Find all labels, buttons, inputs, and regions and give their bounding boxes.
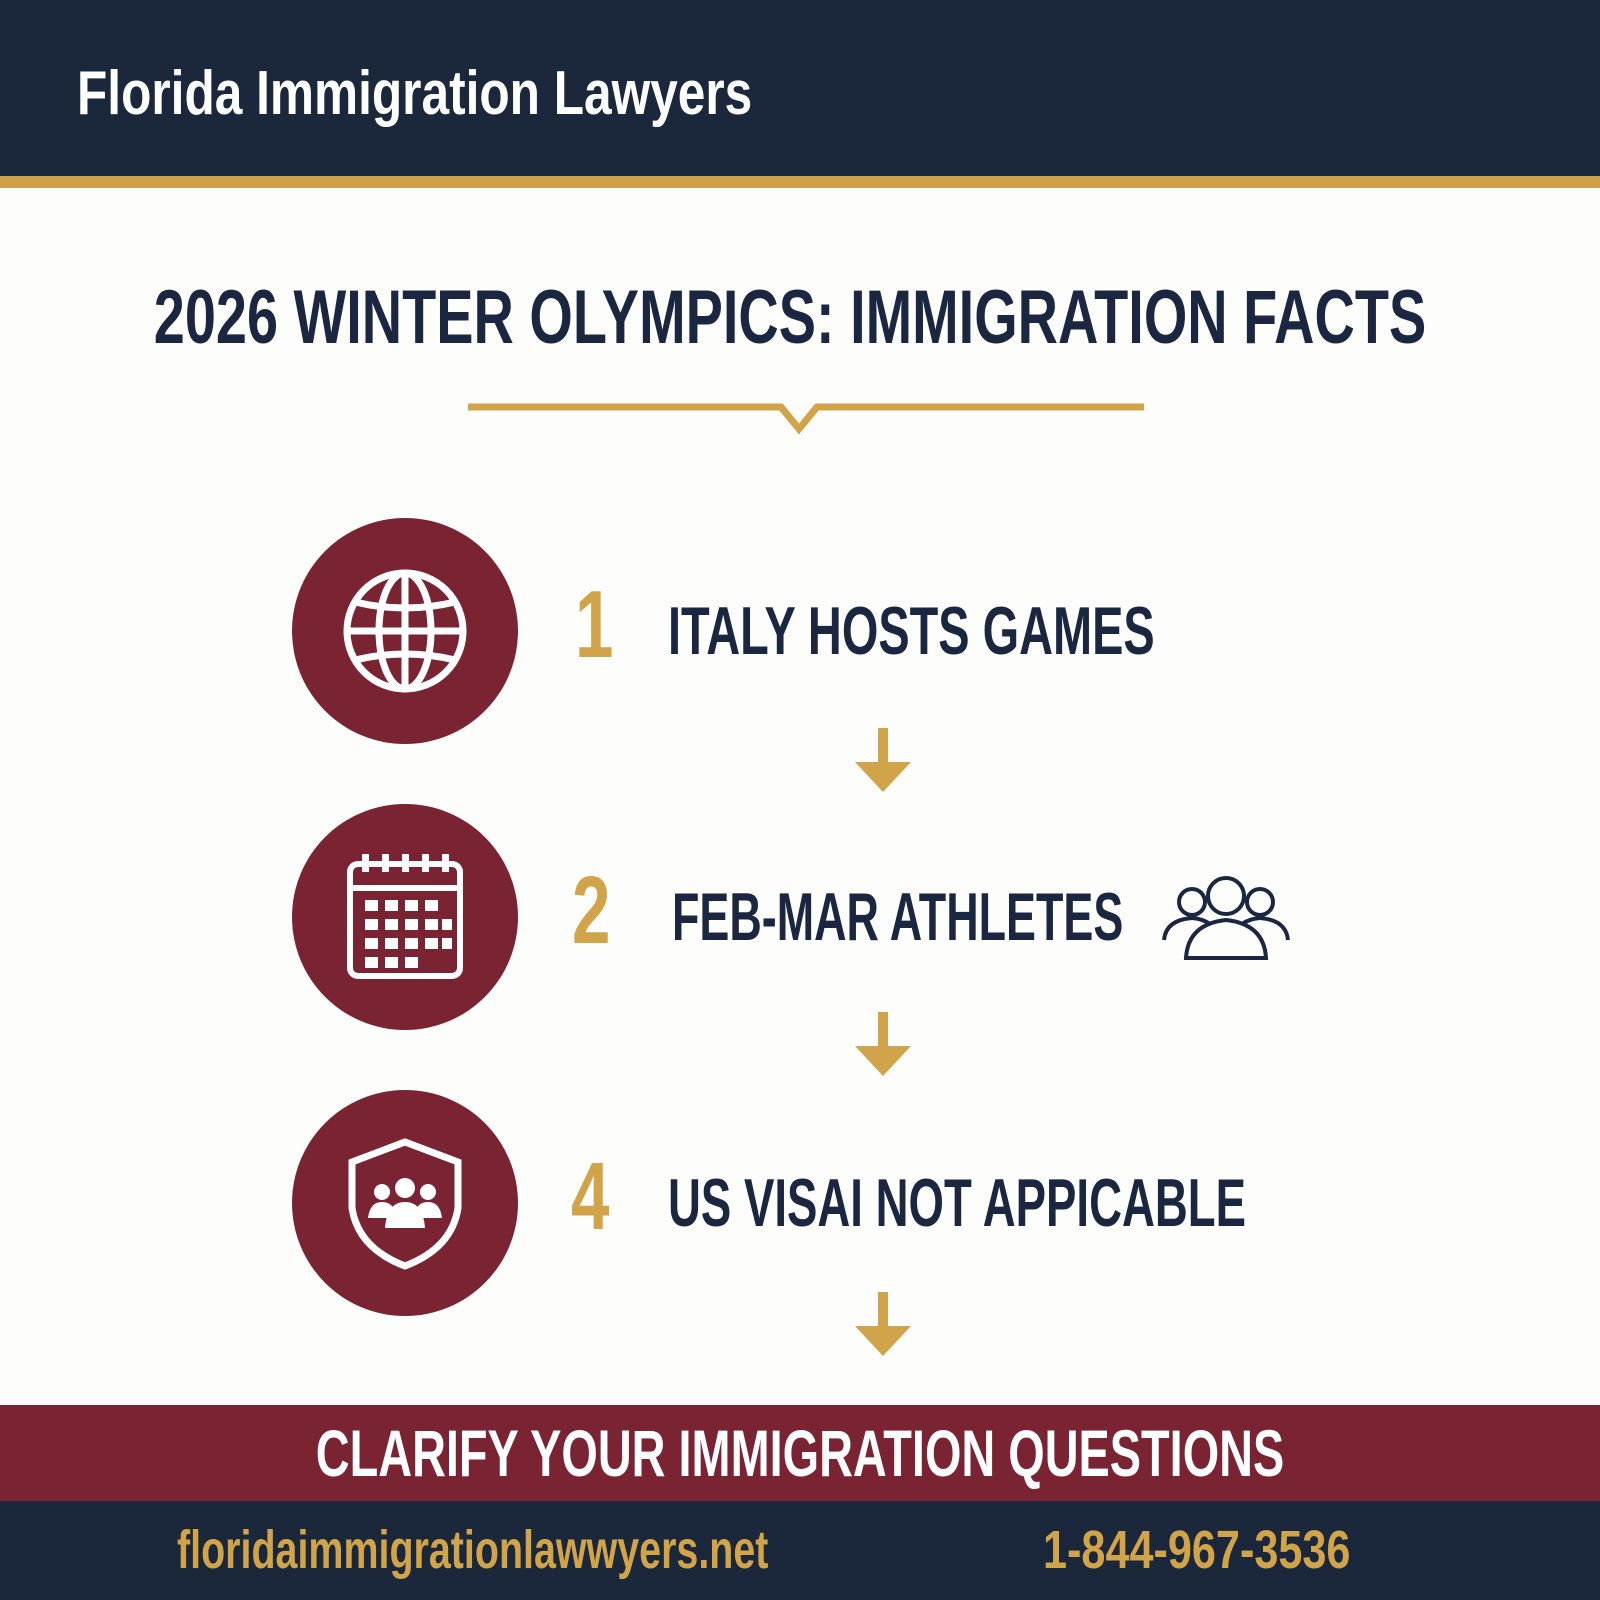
icon: globe (292, 518, 518, 744)
header bar (0, 0, 1600, 176)
step 2 (292, 804, 1290, 1030)
title divider (468, 404, 1144, 434)
text: US VISAI NOT APPICABLE (668, 1165, 1246, 1241)
icon: shield with people (292, 1090, 518, 1316)
number 4: 4 (571, 1143, 609, 1250)
arrow 1 (855, 728, 911, 792)
footer (0, 1501, 1600, 1600)
gold stripe (0, 176, 1600, 188)
header title: Florida Immigration Lawyers (77, 59, 752, 128)
main title: 2026 WINTER OLYMPICS: IMMIGRATION FACTS (154, 275, 1426, 360)
number 1: 1 (575, 571, 613, 678)
phone: 1-844-967-3536 (1043, 1520, 1350, 1580)
text: FEB-MAR ATHLETES (672, 879, 1123, 955)
step 3 (292, 1090, 1246, 1316)
number 2: 2 (572, 857, 610, 964)
call to action band (0, 1405, 1600, 1501)
icon: people (1162, 876, 1290, 960)
cta text: CLARIFY YOUR IMMIGRATION QUESTIONS (316, 1416, 1284, 1490)
arrow 3 (855, 1292, 911, 1356)
text: ITALY HOSTS GAMES (668, 593, 1155, 669)
arrow 2 (855, 1012, 911, 1076)
icon: calendar (292, 804, 518, 1030)
step 1 (292, 518, 1155, 744)
website: floridaimmigrationlawwyers.net (177, 1520, 768, 1580)
